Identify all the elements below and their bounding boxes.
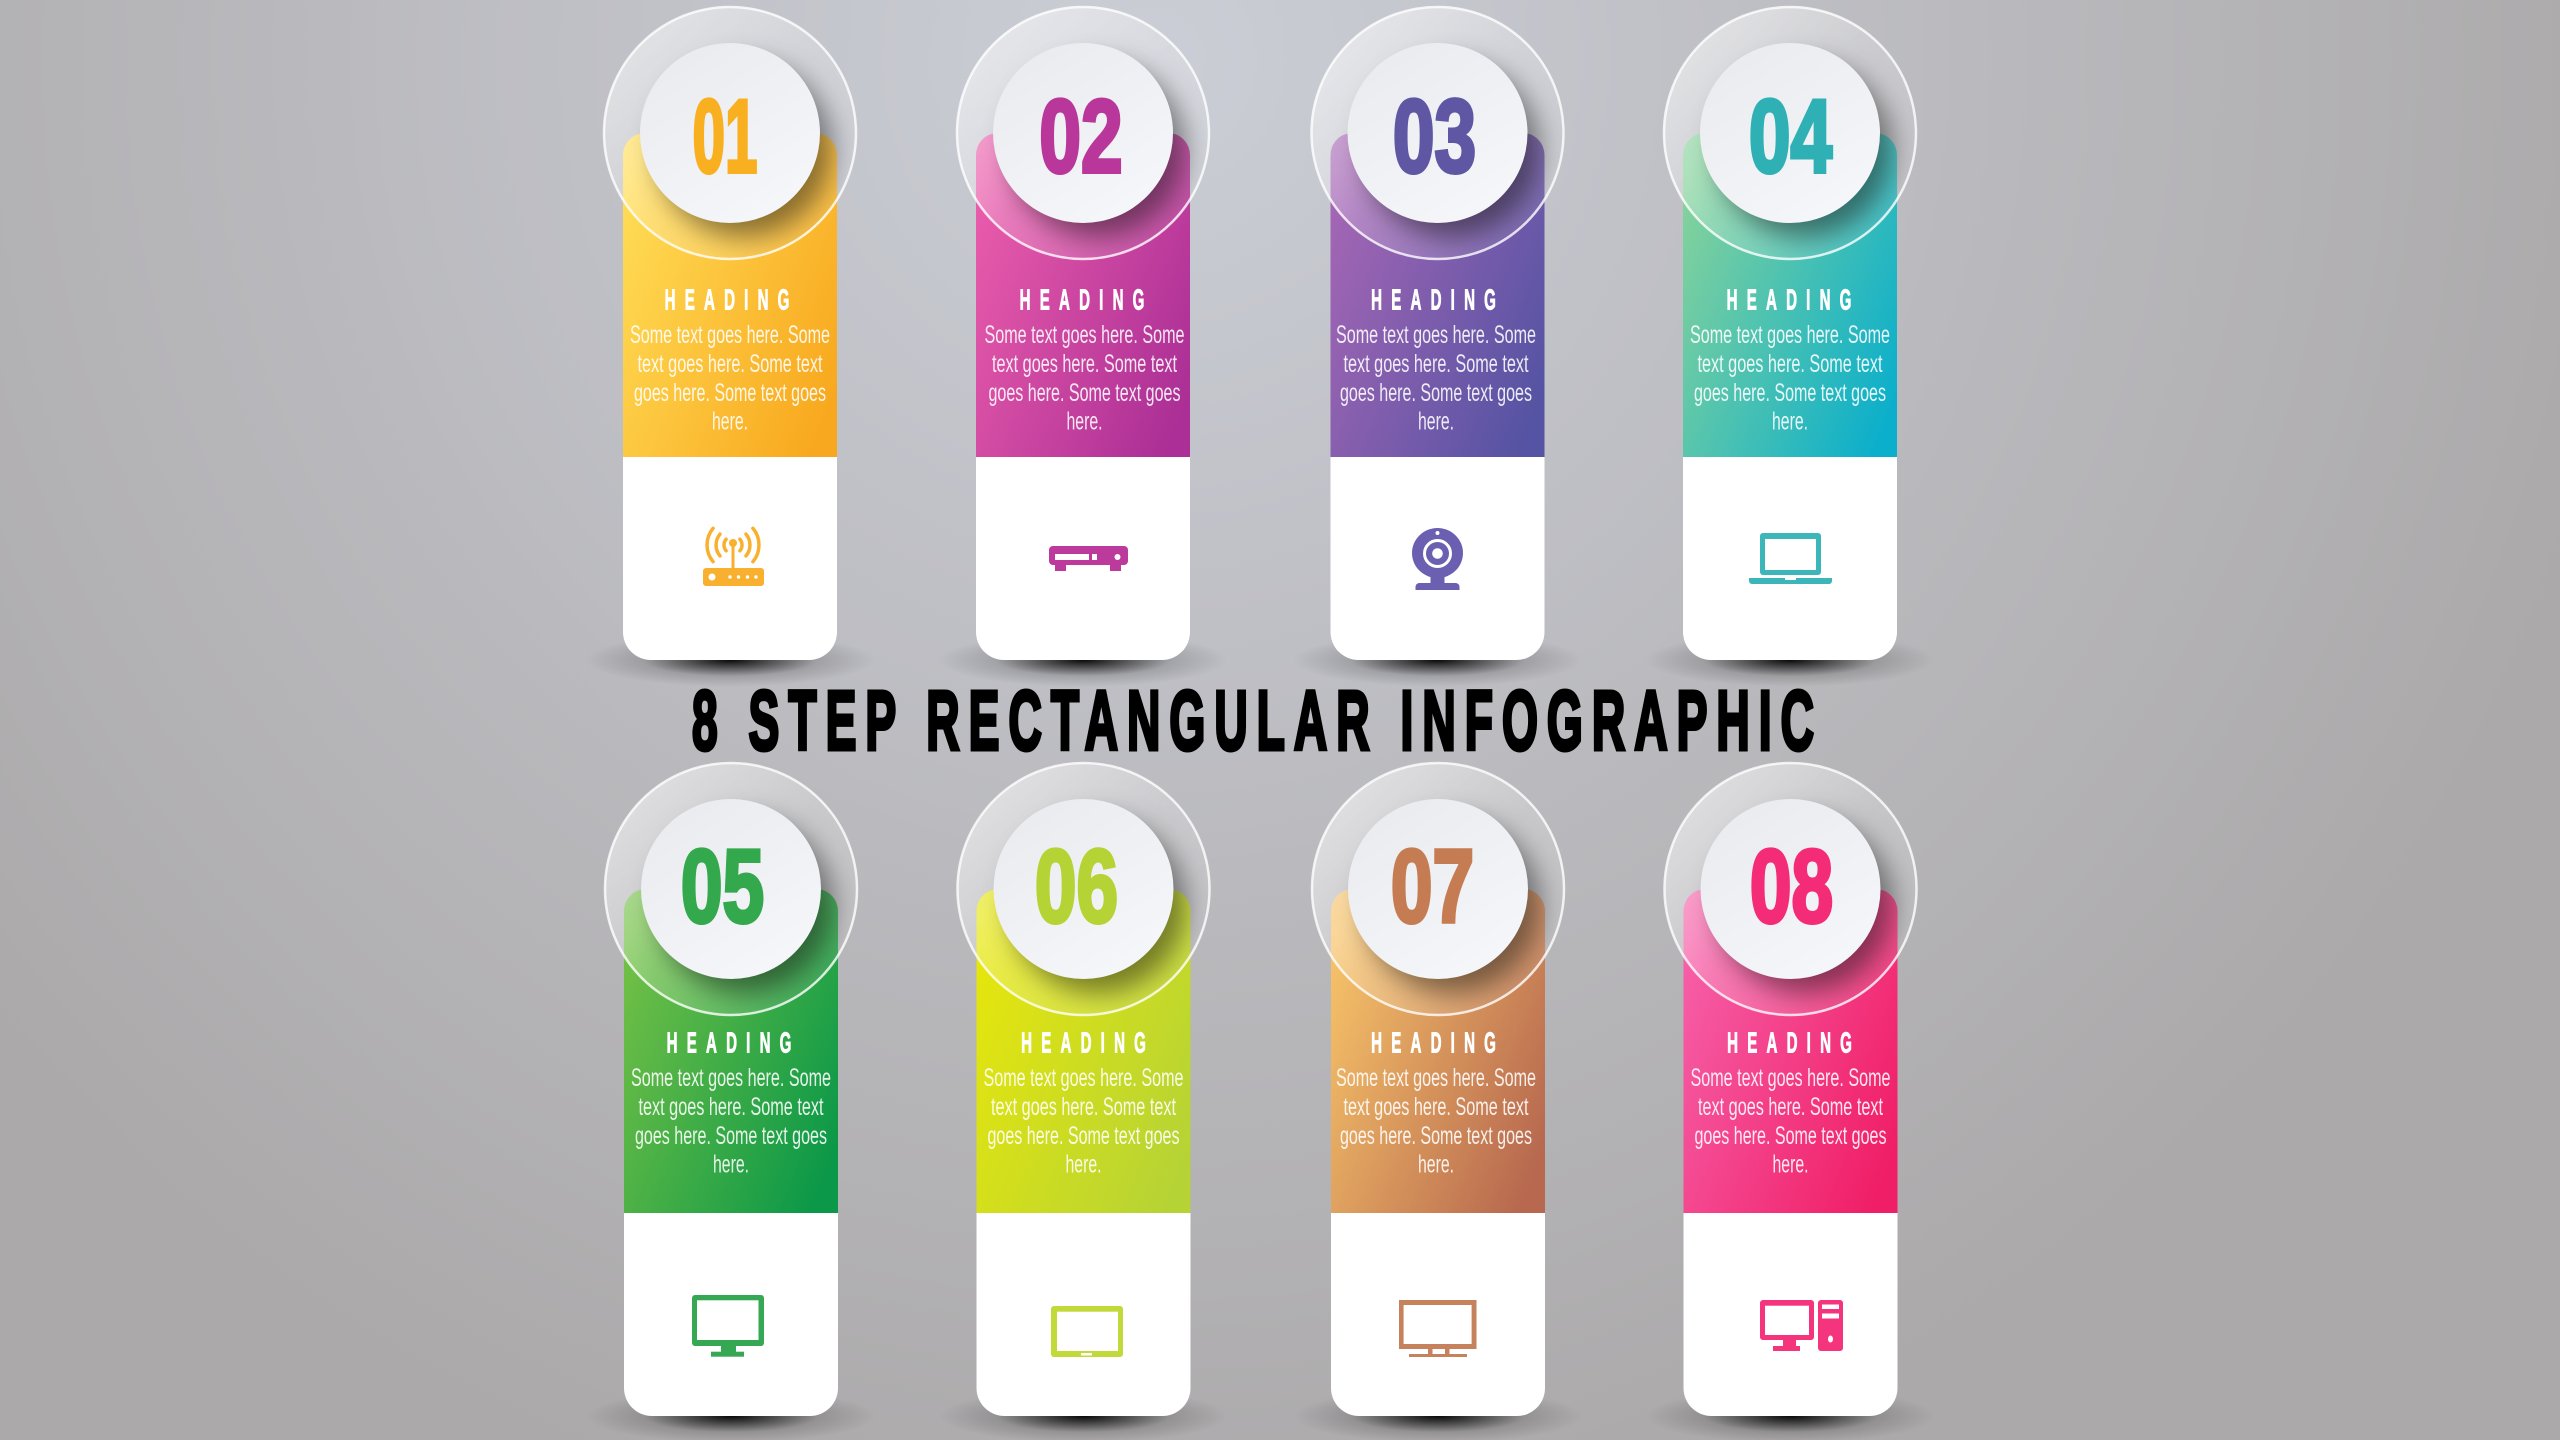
disc shadow	[1010, 817, 1186, 993]
body text: Some text goes here. Some	[1336, 1064, 1536, 1092]
white panel	[1684, 1213, 1898, 1416]
heading: HEADING	[1371, 1026, 1496, 1059]
glass ring	[604, 7, 856, 259]
colour panel	[1684, 889, 1898, 1214]
white panel	[976, 1213, 1190, 1416]
body text: Some text goes here. Some	[1336, 321, 1536, 349]
body text: text goes here. Some text	[1698, 1093, 1883, 1121]
body text: goes here. Some text goes	[635, 1122, 827, 1150]
body text: Some text goes here. Some	[984, 1064, 1184, 1092]
colour panel	[1683, 133, 1897, 458]
body text: text goes here. Some text	[991, 1093, 1176, 1121]
panel: step 07	[1310, 762, 1566, 1440]
colour panel	[1331, 889, 1545, 1214]
number: 03	[1393, 79, 1476, 195]
panel: step 05	[604, 762, 858, 1440]
colour panel	[1330, 133, 1544, 458]
body text: Some text goes here. Some	[1690, 321, 1890, 349]
number disc	[1700, 43, 1880, 223]
number: 02	[1039, 79, 1123, 195]
disc shadow	[1716, 61, 1892, 237]
number: 07	[1391, 829, 1474, 945]
colour panel	[623, 133, 837, 458]
panel: step 02	[955, 6, 1212, 684]
body text	[630, 321, 830, 436]
panel: step 08	[1663, 762, 1918, 1440]
glass ring	[605, 763, 857, 1015]
number: 06	[1035, 829, 1118, 945]
body text	[1690, 1064, 1890, 1178]
body text	[984, 321, 1184, 436]
body text: here.	[1418, 408, 1454, 436]
glass ring	[958, 763, 1210, 1015]
panel: step 03	[1310, 6, 1566, 684]
disc shadow	[1364, 817, 1540, 993]
card shadow	[585, 633, 875, 687]
body text: Some text goes here. Some	[630, 321, 830, 349]
number: 01	[693, 79, 757, 195]
body text: goes here. Some text goes	[1340, 379, 1532, 407]
number disc	[640, 43, 820, 223]
disc shadow	[1009, 61, 1185, 237]
body text: here.	[1772, 1150, 1808, 1178]
heading: HEADING	[1021, 1026, 1146, 1059]
icon: widescreen display	[1399, 1300, 1476, 1357]
body text	[984, 1064, 1184, 1178]
icon: webcam	[1412, 528, 1463, 590]
card shadow	[938, 633, 1228, 687]
heading: HEADING	[1020, 283, 1144, 316]
glass ring	[957, 7, 1209, 259]
title: 8 STEP RECTANGULAR INFOGRAPHIC	[692, 675, 1814, 768]
body text	[1690, 321, 1890, 436]
body text	[631, 1064, 831, 1178]
number disc	[993, 43, 1173, 223]
body text: text goes here. Some text	[992, 350, 1177, 378]
number: 05	[681, 829, 764, 945]
body text: text goes here. Some text	[1344, 1093, 1529, 1121]
glass ring	[1664, 7, 1916, 259]
icon: laptop	[1749, 533, 1832, 584]
glass ring	[1664, 763, 1916, 1015]
icon: monitor	[692, 1295, 764, 1357]
white panel	[1683, 457, 1897, 660]
number disc	[1700, 799, 1880, 979]
white panel	[624, 1213, 838, 1416]
icon: set-top box	[1049, 546, 1128, 571]
number disc	[641, 799, 821, 979]
heading: HEADING	[1727, 283, 1851, 316]
panel: step 06	[956, 762, 1211, 1440]
white panel	[976, 457, 1190, 660]
panel: step 04	[1662, 6, 1918, 684]
card shadow	[1293, 1389, 1583, 1440]
heading: HEADING	[667, 1026, 791, 1059]
body text: goes here. Some text goes	[634, 379, 826, 407]
colour panel	[976, 133, 1190, 458]
body text: goes here. Some text goes	[988, 379, 1180, 407]
card shadow	[938, 1389, 1228, 1440]
body text: goes here. Some text goes	[1694, 379, 1886, 407]
body text: Some text goes here. Some	[984, 321, 1184, 349]
glass ring	[1312, 763, 1564, 1015]
white panel	[1330, 457, 1544, 660]
disc shadow	[657, 817, 833, 993]
glass ring	[1312, 7, 1564, 259]
card shadow	[1292, 633, 1582, 687]
disc shadow	[1364, 61, 1540, 237]
body text	[1336, 321, 1536, 436]
card shadow	[1645, 633, 1935, 687]
body text: text goes here. Some text	[1698, 350, 1883, 378]
icon: router	[703, 528, 764, 586]
body text: goes here. Some text goes	[988, 1122, 1180, 1150]
body text: here.	[713, 1150, 749, 1178]
white panel	[1331, 1213, 1545, 1416]
disc shadow	[1716, 817, 1892, 993]
body text: Some text goes here. Some	[1690, 1064, 1890, 1092]
body text: goes here. Some text goes	[1694, 1122, 1886, 1150]
body text: text goes here. Some text	[1344, 350, 1529, 378]
heading: HEADING	[1371, 283, 1496, 316]
number disc	[1348, 799, 1528, 979]
number: 04	[1749, 79, 1832, 195]
white panel	[623, 457, 837, 660]
number disc	[994, 799, 1174, 979]
panel: step 01	[602, 6, 858, 684]
body text: text goes here. Some text	[638, 1093, 824, 1121]
body text: here.	[1772, 408, 1808, 436]
number disc	[1348, 43, 1528, 223]
heading: HEADING	[1727, 1026, 1852, 1059]
body text: goes here. Some text goes	[1340, 1122, 1532, 1150]
colour panel	[624, 889, 838, 1214]
body text: here.	[712, 408, 748, 436]
card shadow	[586, 1389, 876, 1440]
body text: Some text goes here. Some	[631, 1064, 831, 1092]
colour panel	[976, 889, 1190, 1214]
body text: here.	[1418, 1150, 1454, 1178]
heading: HEADING	[665, 283, 789, 316]
card shadow	[1646, 1389, 1936, 1440]
body text	[1336, 1064, 1536, 1178]
disc shadow	[656, 61, 832, 237]
body text: here.	[1066, 1150, 1102, 1178]
icon: tablet	[1051, 1306, 1123, 1357]
icon: desktop computer	[1760, 1300, 1843, 1351]
body text: here.	[1066, 408, 1102, 436]
body text: text goes here. Some text	[638, 350, 823, 378]
number: 08	[1750, 829, 1833, 945]
